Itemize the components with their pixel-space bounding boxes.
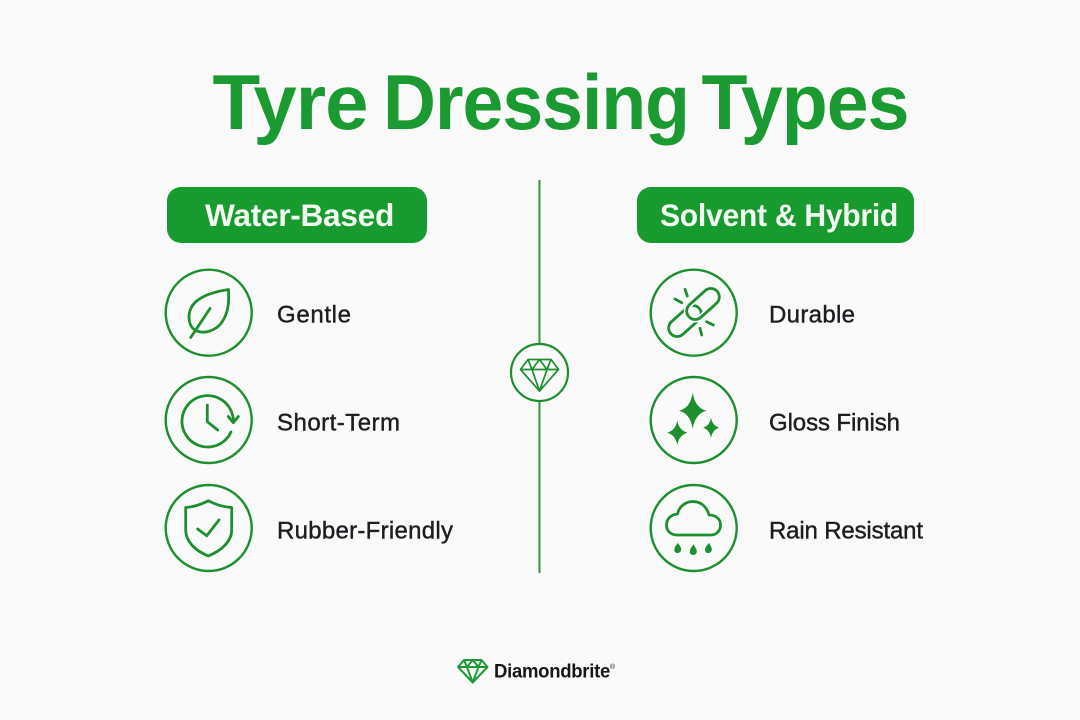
icon: shield with check (186, 501, 232, 556)
heading pill: solvent and hybrid (637, 187, 914, 243)
icon: leaf (189, 290, 229, 338)
icon: chain link (665, 285, 723, 340)
item: gentle: Gentle (277, 302, 351, 328)
panel: solvent and hybrid (637, 187, 923, 571)
heading pill: water-based: Water-Based (205, 197, 394, 233)
item: durable: Durable (769, 302, 855, 328)
item: durable (651, 270, 855, 356)
divider line with centre diamond (511, 180, 568, 573)
logo: Diamondbrite: Diamondbrite (494, 660, 610, 682)
item: rubber-friendly: Rubber-Friendly (277, 518, 453, 544)
item: gloss finish: Gloss Finish (769, 410, 900, 436)
title: Types (702, 58, 908, 146)
icon: centre diamond (520, 360, 558, 391)
icon: rain cloud (666, 502, 720, 555)
item: gloss finish (651, 377, 900, 463)
icon: sparkles (667, 392, 719, 445)
item: rubber-friendly (166, 485, 453, 571)
item: gentle (166, 270, 351, 356)
item: short-term (166, 377, 400, 463)
title: Dressing (383, 58, 689, 146)
heading pill: solvent and hybrid: Solvent & Hybrid (660, 197, 898, 233)
title (212, 58, 908, 146)
item: rain resistant: Rain Resistant (769, 518, 923, 544)
panel: water-based (166, 187, 453, 571)
icon: logo diamond (458, 660, 488, 682)
item: rain resistant (651, 485, 923, 571)
item: short-term: Short-Term (277, 410, 400, 436)
heading pill: water-based (167, 187, 427, 243)
logo: Diamondbrite: ® (610, 663, 616, 671)
icon: clock with arrow (182, 396, 238, 447)
title: Tyre (212, 58, 368, 146)
